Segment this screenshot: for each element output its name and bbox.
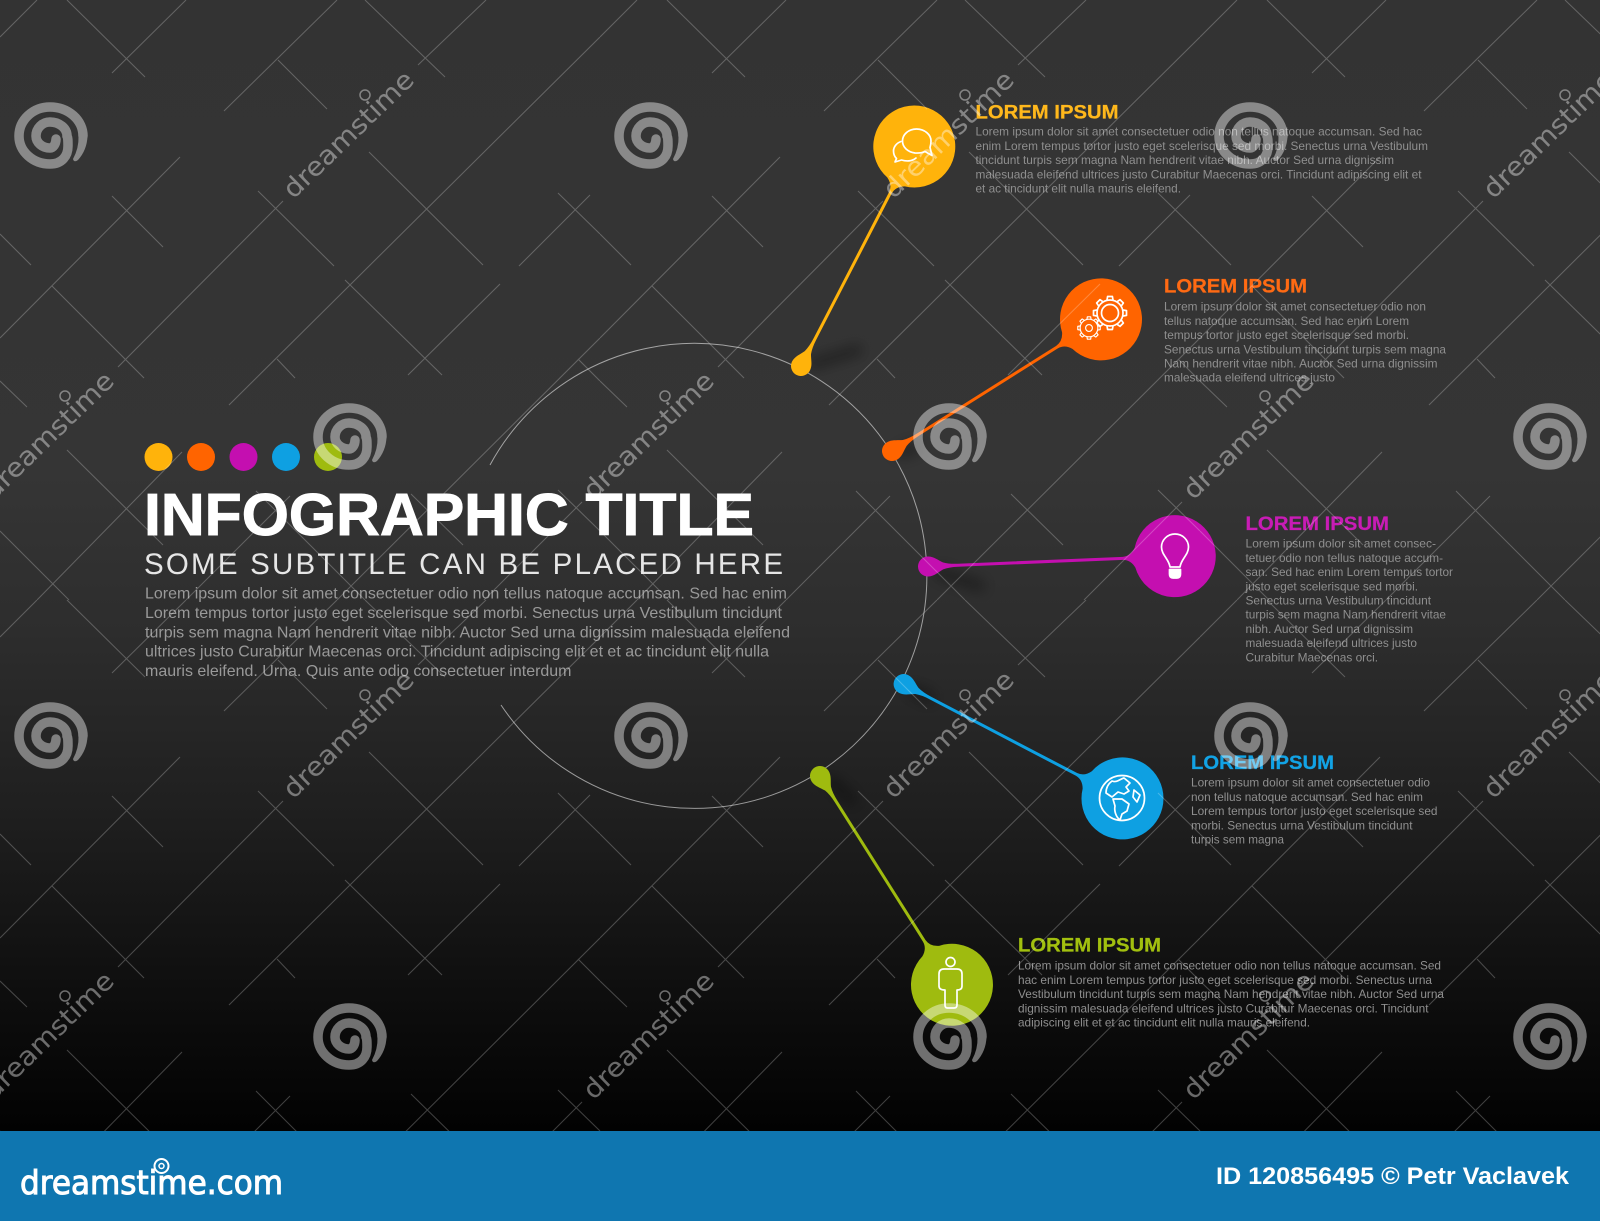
text: item 5: Vestibulum tincidunt turpis sem magna Nam hendrerit vitae nibh. Auctor Sed urna <box>1018 987 1444 1001</box>
text: item 3: Lorem ipsum dolor sit amet consec- <box>1246 537 1436 551</box>
pin: green <box>780 746 1009 1041</box>
text: item 3: tetuer odio non tellus natoque accum- <box>1246 551 1443 565</box>
heading: item 2: LOREM IPSUM <box>1164 276 1307 298</box>
text: item 3: Senectus urna Vestibulum tincidunt <box>1246 594 1432 608</box>
text: item 2: malesuada eleifend ultrices justo <box>1164 371 1335 385</box>
text: item 2: tellus natoque accumsan. Sed hac enim Lorem <box>1164 314 1409 328</box>
pin: orange <box>862 263 1158 491</box>
pin: magenta <box>916 513 1217 608</box>
icon: light bulb <box>1162 534 1188 578</box>
text: item 3: san. Sed hac enim Lorem tempus tortor <box>1246 565 1453 579</box>
text: item 1: tincidunt turpis sem magna Nam hendrerit vitae nibh. Auctor Sed urna dignissim <box>976 153 1394 167</box>
intro paragraph: turpis sem magna Nam hendrerit vitae nibh. Auctor Sed urna dignissim malesuada eleifend <box>145 624 790 641</box>
heading: item 5: LOREM IPSUM <box>1018 935 1161 957</box>
subtitle: SOME SUBTITLE CAN BE PLACED HERE <box>144 548 783 581</box>
heading: item 3: LOREM IPSUM <box>1246 513 1389 535</box>
icon: speech bubbles <box>894 129 932 162</box>
icon: globe <box>1100 776 1144 820</box>
text: item 4: Lorem ipsum dolor sit amet consectetuer odio <box>1191 776 1430 790</box>
footer logo: dreamstime.com <box>20 1163 283 1202</box>
central ring arc <box>490 343 927 808</box>
text: item 1: malesuada eleifend ultrices justo Curabitur Maecenas orci. Tincidunt adipiscing elit et <box>976 167 1422 181</box>
text: item 3 <box>1245 537 1453 664</box>
watermark wordmarks: dreamstime <box>877 665 1021 805</box>
text: item 1: Lorem ipsum dolor sit amet consectetuer odio non tellus natoque accumsan. Sed hac <box>976 125 1422 139</box>
text: item 3: turpis sem magna Nam hendrerit vitae <box>1246 608 1446 622</box>
text: item 5: hac enim Lorem tempus tortor justo eget scelerisque sed morbi. Senectus urna <box>1018 973 1432 987</box>
text: item 1: enim Lorem tempus tortor justo eget scelerisque sed morbi. Senectus urna Vestibulum <box>976 139 1428 153</box>
intro paragraph <box>145 586 790 680</box>
pin: blue <box>876 643 1178 854</box>
title: INFOGRAPHIC TITLE <box>144 482 754 548</box>
text: item 4: non tellus natoque accumsan. Sed hac enim <box>1191 790 1423 804</box>
text: item 5: dignissim malesuada eleifend ultrices justo Curabitur Maecenas orci. Tincidunt <box>1018 1001 1429 1015</box>
intro paragraph: mauris eleifend. Urna. Quis ante odio consectetuer interdum <box>145 663 572 680</box>
pin: yellow <box>760 91 970 394</box>
text: item 2: Nam hendrerit vitae nibh. Auctor Sed urna dignissim <box>1164 356 1438 370</box>
text: item 5 <box>1018 959 1444 1030</box>
text: item 3: nibh. Auctor Sed urna dignissim <box>1246 622 1413 636</box>
text: item 4: morbi. Senectus urna Vestibulum tincidunt <box>1191 818 1413 832</box>
text: item 5: Lorem ipsum dolor sit amet consectetuer odio non tellus natoque accumsan. Sed <box>1018 959 1441 973</box>
watermark wordmarks: dreamstime <box>277 65 421 205</box>
icon: gears <box>1078 296 1126 339</box>
text: item 2: Lorem ipsum dolor sit amet consectetuer odio non <box>1164 300 1426 314</box>
colour dots <box>144 443 342 471</box>
footer credit: ID 120856495 © Petr Vaclavek <box>1216 1163 1570 1190</box>
watermark wordmarks: dreamstime <box>277 665 421 805</box>
text: item 4: Lorem tempus tortor justo eget scelerisque sed <box>1191 804 1438 818</box>
text: item 4 <box>1191 776 1438 846</box>
pin shadows <box>812 350 980 800</box>
text: item 2: tempus tortor justo eget scelerisque sed morbi. <box>1164 328 1409 342</box>
footer band <box>0 1131 1600 1221</box>
watermark wordmarks: dreamstime <box>1177 966 1321 1106</box>
watermark wordmarks: dreamstime <box>577 966 721 1106</box>
intro paragraph: Lorem ipsum dolor sit amet consectetuer odio non tellus natoque accumsan. Sed hac enim <box>145 586 787 603</box>
text: item 2: Senectus urna Vestibulum tincidunt turpis sem magna <box>1164 342 1446 356</box>
text: item 4: turpis sem magna <box>1191 832 1284 846</box>
watermark wordmarks: dreamstime <box>577 366 721 506</box>
text: item 5: adipiscing elit et et ac tincidunt elit nulla mauris eleifend. <box>1018 1016 1310 1030</box>
text: item 3: malesuada eleifend ultrices justo <box>1246 636 1417 650</box>
watermark wordmarks: dreamstime <box>1177 366 1321 506</box>
icon: person <box>939 958 962 1008</box>
text: item 1 <box>976 125 1428 196</box>
heading: item 4: LOREM IPSUM <box>1191 752 1334 774</box>
text: item 3: Curabitur Maecenas orci. <box>1246 650 1378 664</box>
text: item 1: et ac tincidunt elit nulla mauris eleifend. <box>976 182 1181 196</box>
text: item 3: justo eget scelerisque sed morbi. <box>1245 579 1418 593</box>
text: item 2 <box>1164 300 1446 385</box>
intro paragraph: ultrices justo Curabitur Maecenas orci. Tincidunt adipiscing elit et et ac tincidunt elit nulla <box>145 644 769 661</box>
heading: item 1: LOREM IPSUM <box>976 101 1118 123</box>
watermark wordmarks: dreamstime <box>877 65 1021 205</box>
intro paragraph: Lorem tempus tortor justo eget scelerisque sed morbi. Senectus urna Vestibulum tincidunt <box>145 605 783 622</box>
